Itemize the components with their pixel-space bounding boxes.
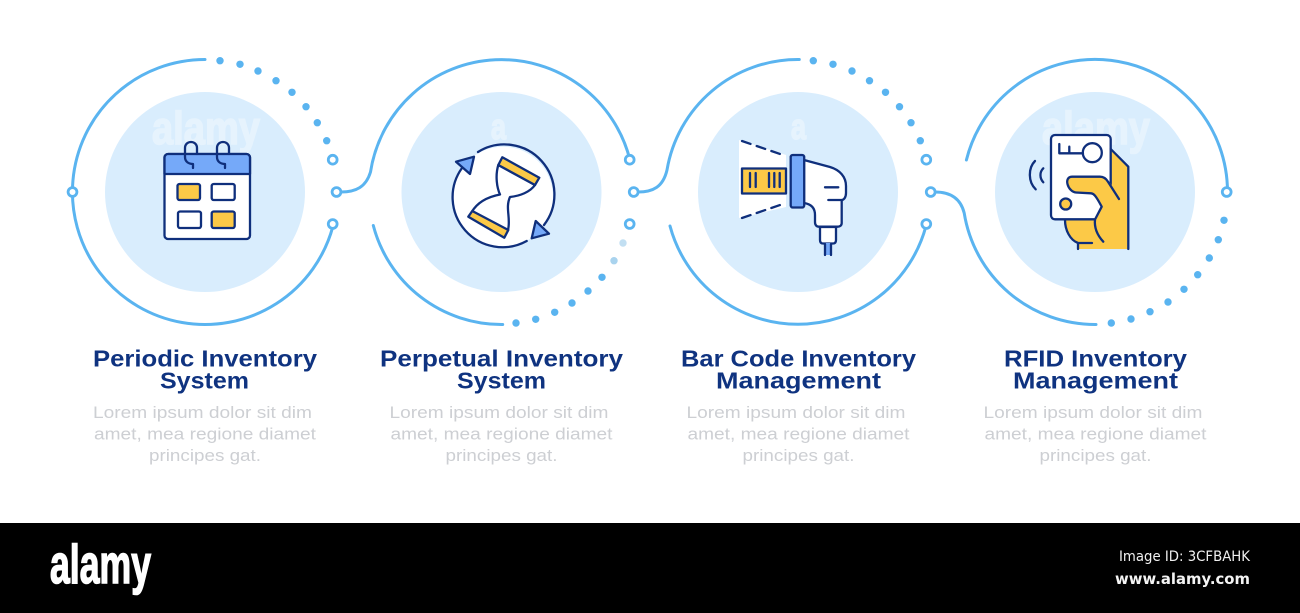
description 1 — [93, 404, 316, 465]
heading 2 — [380, 346, 623, 394]
description 4 — [984, 404, 1207, 465]
heading 1: System — [160, 368, 249, 394]
ring arc 1 — [72, 59, 333, 324]
backdrop circle 2 — [402, 92, 602, 292]
heading 2: Perpetual Inventory — [380, 346, 623, 372]
description 4: principes gat. — [1040, 447, 1152, 465]
description 2 — [390, 404, 613, 465]
heading 3 — [681, 346, 916, 394]
watermark 4: alamy — [1042, 102, 1150, 154]
watermark 3: a — [791, 106, 807, 147]
panel: bar code inventory management — [629, 57, 931, 324]
backdrop circle 3 — [698, 92, 898, 292]
panel: perpetual inventory system — [332, 60, 634, 327]
description 4: amet, mea regione diamet — [984, 426, 1207, 444]
description 3: amet, mea regione diamet — [688, 426, 910, 444]
heading 3: Management — [716, 368, 881, 394]
icon: hourglass with arrows — [453, 144, 554, 247]
connector and upper arc 2 — [341, 60, 630, 192]
icon: calendar — [164, 142, 250, 239]
panel: rfid inventory management — [926, 59, 1231, 327]
watermark 1: alamy — [152, 102, 260, 154]
footer band — [0, 523, 1300, 613]
description 2: amet, mea regione diamet — [390, 426, 613, 444]
nodes 2 — [332, 155, 634, 228]
panel: periodic inventory system — [68, 57, 337, 324]
heading 3: Bar Code Inventory — [681, 346, 916, 372]
description 3 — [686, 404, 910, 465]
connector and lower arc 4 — [935, 192, 1096, 324]
nodes 1 — [68, 155, 337, 228]
description 2: Lorem ipsum dolor sit dim — [390, 404, 608, 422]
heading 4: Management — [1013, 368, 1178, 394]
description 3: Lorem ipsum dolor sit dim — [686, 404, 906, 422]
description 4: Lorem ipsum dolor sit dim — [984, 404, 1202, 422]
dotted arc 1 — [216, 57, 330, 144]
watermark 2: a — [491, 106, 507, 147]
text block: rfid inventory management — [984, 346, 1207, 465]
heading 4 — [1004, 346, 1187, 394]
nodes 3 — [629, 155, 931, 228]
icon: barcode scanner — [739, 140, 846, 255]
heading 1: Periodic Inventory — [93, 346, 317, 372]
description 2: principes gat. — [446, 447, 558, 465]
site url: www.alamy.com — [1115, 570, 1250, 588]
backdrop circle 4 — [995, 92, 1195, 292]
description 1: principes gat. — [149, 447, 261, 465]
backdrop circle 1 — [105, 92, 305, 292]
description 3: principes gat. — [742, 447, 854, 465]
connector and upper arc 3 — [638, 59, 799, 192]
heading 2: System — [457, 368, 546, 394]
description 1: Lorem ipsum dolor sit dim — [93, 404, 312, 422]
dotted arc 2 — [512, 239, 627, 327]
description 1: amet, mea regione diamet — [94, 426, 316, 444]
heading 1 — [93, 346, 317, 394]
icon: hand holding rfid card — [1030, 135, 1128, 249]
heading 4: RFID Inventory — [1004, 346, 1187, 372]
text block: bar code inventory management — [681, 346, 916, 465]
footer logo: alamy — [50, 533, 151, 595]
dotted arc 4 — [1108, 217, 1228, 327]
nodes 4 — [926, 188, 1231, 196]
lower arc 3 — [670, 226, 926, 324]
upper arc 4 — [966, 59, 1228, 192]
text block: perpetual inventory system — [380, 346, 623, 465]
lower arc 2 — [373, 226, 503, 324]
image id: Image ID: 3CFBAHK — [1119, 549, 1250, 565]
text block: periodic inventory system — [93, 346, 317, 465]
dotted arc 3 — [810, 57, 924, 144]
